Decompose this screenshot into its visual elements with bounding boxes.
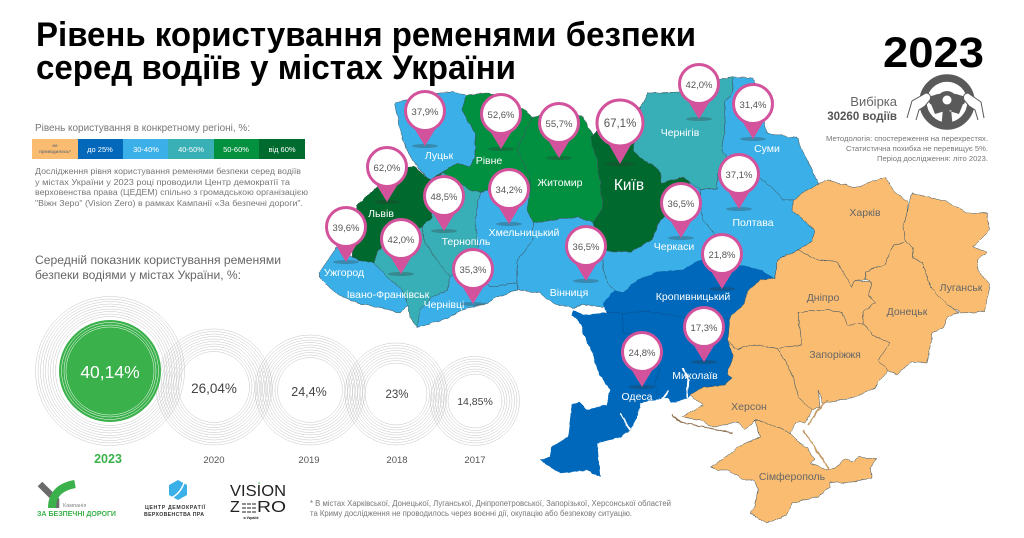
region: Luhansk: [903, 193, 990, 313]
region: Khmelnytskyi: [470, 188, 533, 287]
study description: верховенства права (ЦЕДЕМ) спільно з громадською організацією: [35, 187, 309, 197]
logo: Центр демократії: [144, 480, 206, 518]
city labels: Черкаси: [654, 241, 694, 253]
footnote: [310, 499, 671, 518]
legend colour scale: проводилось*: [39, 149, 71, 154]
pin: Chernihiv 42,0%: 42,0%: [686, 80, 713, 91]
value: 24,4%: 24,4%: [291, 385, 327, 399]
map of Ukraine: [319, 77, 990, 523]
logo: Vision Zero: VISION: [230, 483, 286, 500]
pin: Mykolaiv 17,3%: 17,3%: [691, 323, 718, 334]
region: Dnipro: [728, 250, 875, 350]
estuaries: [620, 368, 688, 430]
logo: Vision Zero: [230, 482, 286, 520]
pin: Khmelnytskyi 34,2%: [490, 170, 528, 226]
sample size: [827, 94, 898, 123]
city labels: Сімферополь: [759, 471, 826, 483]
pin: Chernivtsi 35,3%: 35,3%: [460, 265, 487, 276]
region: Crimea: [711, 420, 877, 523]
pin: Ivano-Frankivsk 42,0%: 42,0%: [388, 235, 415, 246]
city labels: Дніпро: [807, 292, 839, 304]
year labels: [94, 452, 486, 466]
pin: Odesa 24,8%: 24,8%: [629, 348, 656, 359]
region: Poltava: [700, 170, 815, 278]
logo: Vision Zero: в Україні: [243, 516, 259, 520]
pin: Odesa 24,8%: [622, 332, 662, 389]
legend colour scale: до 25%: [87, 145, 113, 154]
year heading: 2023: [883, 29, 984, 77]
city labels: Ужгород: [324, 267, 364, 279]
value: 23%: 23%: [385, 389, 409, 401]
pin: Mykolaiv 17,3%: [684, 308, 724, 364]
pin: Kyiv 67,1%: 67,1%: [604, 118, 636, 130]
average heading: Середній показник користування ременями: [35, 253, 281, 267]
pin: Kropyvnytskyi 21,8%: 21,8%: [709, 250, 736, 261]
pin: Kyiv 67,1%: [597, 100, 643, 166]
logo: Центр демократії: ЦЕНТР ДЕМОКРАТІЇ: [145, 504, 206, 511]
legend colour scale: не: [52, 143, 58, 148]
pin: Cherkasy 36,5%: [662, 184, 700, 240]
city labels: Кропивницький: [656, 291, 730, 303]
city labels: Харків: [849, 207, 881, 219]
footnote: та Криму дослідження не проводилось через воєнні дії, окупацію або безпекову ситуацію.: [310, 509, 632, 518]
region: Kyiv: [590, 107, 690, 252]
legend colour scale: [32, 139, 305, 159]
pin: Lutsk 37,9%: [406, 92, 444, 148]
region: Chernihiv: [633, 77, 733, 190]
city labels: [324, 127, 983, 483]
Tendra spit: [672, 415, 733, 433]
city labels: Чернівці: [424, 299, 464, 311]
pin: Vinnytsia 36,5%: [566, 226, 606, 283]
region: Volyn: [395, 92, 475, 180]
city labels: Запоріжжя: [809, 349, 861, 361]
region: Zakarpattia: [319, 247, 408, 313]
region: Cherkasy: [603, 182, 737, 293]
methodology note: [826, 134, 988, 163]
pin: Sumy 31,4%: [734, 84, 772, 141]
ring chart: 2020: [156, 329, 272, 445]
logo: За безпечні дороги: Кампанія: [63, 503, 86, 509]
pin: Rivne 52,6%: [482, 94, 520, 151]
methodology note: Статистична похибка не перевищує 5%.: [846, 144, 988, 153]
year labels: 2020: [203, 455, 225, 466]
ring chart: 2018: [345, 343, 447, 445]
value: 14,85%: 14,85%: [457, 396, 493, 408]
methodology note: Методологія: спостереження на перехрестях.: [826, 134, 988, 143]
city labels: Івано-Франківськ: [347, 289, 430, 301]
region: Vinnytsia: [517, 217, 615, 308]
legend colour scale: від 60%: [268, 145, 296, 154]
Arabat spit: [803, 400, 830, 470]
title: серед водіїв у містах України: [36, 49, 516, 87]
pin: Khmelnytskyi 34,2%: 34,2%: [496, 185, 523, 196]
logo: Vision Zero: RO: [257, 499, 286, 516]
region: Kherson: [682, 340, 812, 433]
city labels: Вінниця: [550, 287, 588, 299]
average heading: [35, 253, 281, 282]
city labels: Суми: [754, 143, 780, 155]
title: [36, 16, 696, 87]
pin: Ivano-Frankivsk 42,0%: [382, 220, 420, 276]
pin: Lviv 62,0%: [368, 148, 406, 204]
year labels: 2017: [464, 455, 486, 466]
city labels: Луганськ: [940, 282, 983, 294]
ring chart: 2023: [36, 296, 184, 446]
ring chart: 2017: [430, 356, 520, 446]
pin: Chernivtsi 35,3%: [454, 250, 492, 306]
city labels: Чернігів: [661, 127, 700, 139]
pin: Zhytomyr 55,7%: 55,7%: [546, 119, 573, 130]
logo: За безпечні дороги: [37, 484, 116, 518]
region: Ivano-Frankivsk: [374, 227, 450, 327]
city labels: Київ: [614, 177, 644, 194]
sample size: 30260 водіїв: [827, 111, 897, 123]
value: 40,14%: 40,14%: [80, 362, 140, 382]
pin: Poltava 37,1%: 37,1%: [726, 170, 753, 181]
pin: Sumy 31,4%: 31,4%: [740, 100, 767, 111]
study description: у містах України у 2023 році проводили Центр демократії та: [35, 177, 290, 187]
pin: Cherkasy 36,5%: 36,5%: [668, 199, 695, 210]
study description: Дослідження рівня користування ременями безпеки серед водіїв: [35, 166, 301, 176]
city labels: Львів: [368, 208, 394, 220]
pin: Poltava 37,1%: [720, 154, 758, 211]
region: Rivne: [442, 93, 533, 192]
pin: Lutsk 37,9%: 37,9%: [412, 107, 439, 118]
legend colour scale: 50-60%: [223, 145, 249, 154]
region: Zaporizhzhia: [777, 310, 890, 410]
region: Ternopil: [422, 172, 480, 277]
pin: Zhytomyr 55,7%: [540, 104, 578, 160]
pin: Chernihiv 42,0%: [680, 64, 718, 121]
year labels: 2019: [298, 455, 320, 466]
pin: Lviv 62,0%: 62,0%: [374, 163, 401, 174]
footnote: * В містах Харківської, Донецької, Луганської, Дніпропетровської, Запорізької, Херсонської областей: [310, 499, 671, 508]
city labels: Полтава: [732, 217, 774, 229]
city labels: Житомир: [537, 177, 583, 189]
region: Chernivtsi: [417, 262, 518, 327]
pin: Vinnytsia 36,5%: 36,5%: [573, 242, 600, 253]
logo: За безпечні дороги: ЗА БЕЗПЕЧНІ ДОРОГИ: [37, 509, 116, 518]
region: Odesa, Mykolaiv and Kropyvnytskyi: [540, 255, 775, 477]
sample size: Вибірка: [850, 94, 898, 109]
title: Рівень користування ременями безпеки: [36, 16, 696, 54]
region: Sumy: [718, 77, 820, 200]
legend colour scale: 40-50%: [178, 145, 204, 154]
region: Kharkiv: [792, 177, 908, 287]
region: Donetsk: [863, 242, 958, 375]
average heading: безпеки водіями у містах України, %:: [35, 268, 241, 282]
year labels: 2018: [386, 455, 408, 466]
study description: [35, 166, 309, 208]
region: Zhytomyr: [517, 110, 603, 223]
city labels: Хмельницький: [489, 227, 560, 239]
city labels: Луцьк: [425, 150, 454, 162]
city labels: Тернопіль: [442, 236, 491, 248]
logo: Центр демократії: ВЕРХОВЕНСТВА ПРА: [144, 512, 204, 518]
value: 26,04%: 26,04%: [191, 381, 237, 396]
logo: Vision Zero: Z: [230, 499, 240, 516]
study description: "Віжн Зеро" (Vision Zero) в рамках Кампанії «За безпечні дороги".: [35, 198, 303, 208]
ring chart: 2019: [255, 335, 365, 445]
pin: Uzhhorod 39,6%: 39,6%: [333, 223, 360, 234]
icon: steering wheel with hands: [907, 78, 984, 126]
legend colour scale: 30-40%: [133, 145, 159, 154]
pin: Ternopil 48,5%: 48,5%: [431, 192, 458, 203]
pin: Uzhhorod 39,6%: [326, 208, 366, 264]
pin: Kropyvnytskyi 21,8%: [702, 234, 742, 291]
city labels: Миколаїв: [672, 370, 718, 382]
city labels: Донецьк: [887, 306, 928, 318]
map regions: [319, 77, 990, 523]
pin: Ternopil 48,5%: [424, 176, 464, 233]
city labels: Одеса: [622, 391, 653, 403]
pin: Rivne 52,6%: 52,6%: [488, 110, 515, 121]
legend heading: Рівень користування в конкретному регіоні, %:: [35, 123, 250, 134]
city labels: Херсон: [731, 401, 767, 413]
year labels: 2023: [94, 452, 122, 466]
city labels: Рівне: [476, 155, 502, 167]
region: Lviv: [352, 165, 442, 263]
methodology note: Період дослідження: літо 2023.: [877, 154, 988, 163]
